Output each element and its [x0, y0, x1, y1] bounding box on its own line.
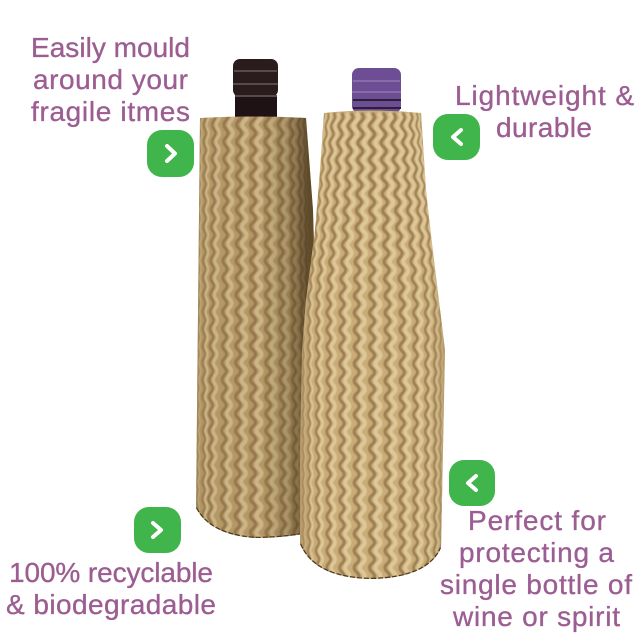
purple bottle cap	[352, 68, 401, 113]
icon: green button top left	[147, 130, 194, 177]
text: perfect for protecting: Perfect for	[468, 505, 606, 536]
black bottle cap	[233, 59, 278, 120]
bottle: left with black cap	[196, 59, 314, 538]
text: recyclable	[6, 557, 216, 620]
bottle: right with purple cap	[295, 68, 450, 589]
left sleeve	[196, 116, 314, 538]
text: recyclable: & biodegradable	[6, 589, 216, 620]
icon: green button lower left	[134, 507, 181, 553]
text: perfect for protecting: wine or spirit	[452, 601, 620, 632]
icon: green button top right	[433, 114, 480, 160]
text: easily mould: Easily mould	[31, 32, 190, 63]
text: perfect for protecting	[440, 505, 632, 632]
text: perfect for protecting: single bottle of	[440, 569, 632, 600]
text: perfect for protecting: protecting a	[459, 537, 614, 568]
text: easily mould: fragile itmes	[31, 96, 190, 127]
right sleeve	[295, 105, 450, 589]
text: easily mould: around your	[33, 64, 188, 95]
text: recyclable: 100% recyclable	[9, 557, 213, 588]
text: easily mould	[31, 32, 190, 127]
text: lightweight and durable: Lightweight &	[455, 80, 634, 111]
icon: green button lower right	[449, 460, 495, 506]
text: lightweight and durable	[455, 80, 634, 143]
text: lightweight and durable: durable	[496, 112, 592, 143]
